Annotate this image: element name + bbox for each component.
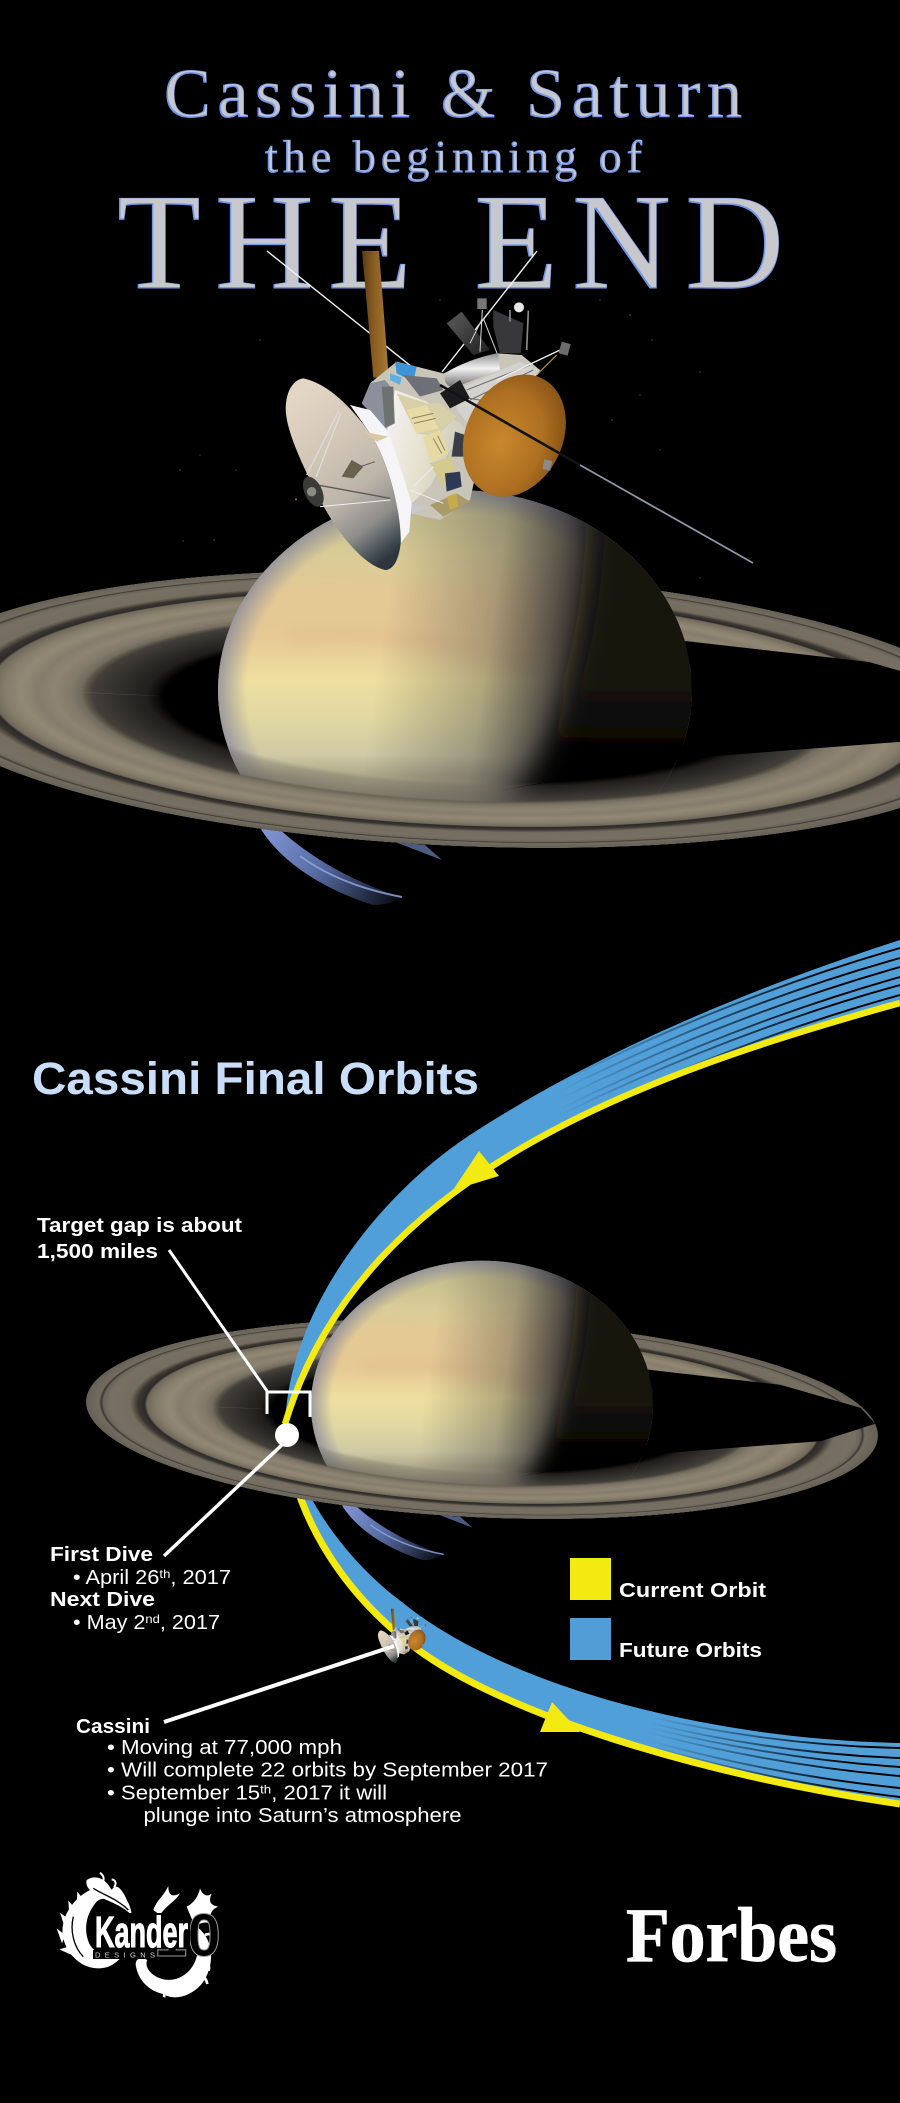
- current orbit, incoming: [285, 1003, 900, 1424]
- dive dates text: [50, 1543, 231, 1634]
- heading: Cassini Final Orbits: Cassini Final Orbits: [32, 1053, 479, 1104]
- saturn rings front and planet shadow, upper illustration: [0, 547, 900, 871]
- star field: [179, 299, 701, 579]
- Cassini facts text: [76, 1715, 548, 1827]
- target gap value: 1,500 miles: [37, 1240, 158, 1263]
- leader line: [164, 1442, 285, 1556]
- saturn, lower illustration (rings and planet): [81, 1217, 883, 1560]
- leader line: [169, 1250, 267, 1391]
- small Cassini spacecraft on orbit: [378, 1609, 429, 1663]
- current orbit, outgoing: [285, 1424, 900, 1804]
- spacecraft antenna wires: [267, 251, 537, 387]
- logo wordmark Designs: DESIGNS: [95, 1950, 155, 1960]
- fact: speed: • Moving at 77,000 mph: [107, 1737, 342, 1759]
- legend swatch: current orbit: [570, 1558, 611, 1600]
- gap bracket: [267, 1392, 310, 1417]
- title line: the beginning of: the beginning of: [265, 131, 643, 182]
- orbit separation lines, outgoing: [650, 1717, 900, 1797]
- first dive date: , 2017: [170, 1567, 231, 1589]
- legend label: current orbit: Current Orbit: [619, 1579, 766, 1602]
- title: [117, 56, 784, 318]
- fact: plunge date: • September 15: [107, 1782, 245, 1804]
- dive marker and leader line: [164, 1423, 299, 1556]
- title line: THE END: THE END: [117, 166, 784, 318]
- saturn rings front and planet shadow, lower illustration: [81, 1302, 883, 1535]
- next dive date: • May 2: [73, 1612, 140, 1634]
- first dive date: • April 26: [73, 1567, 152, 1589]
- next dive date: nd: [145, 1612, 160, 1626]
- dive point marker: [275, 1423, 299, 1447]
- future orbits, incoming band: [285, 940, 900, 1424]
- logo wordmark backing: [93, 1913, 190, 1949]
- first dive date: th: [159, 1567, 170, 1581]
- fact: orbits: • Will complete 22 orbits by September 2017: [107, 1760, 548, 1782]
- target gap callout: [37, 1214, 310, 1417]
- fact: plunge date: , 2017 it will: [271, 1782, 387, 1804]
- arrow: incoming direction: [453, 1151, 499, 1190]
- Cassini leader line: [164, 1646, 394, 1722]
- future orbits, outgoing band: [304, 1500, 900, 1800]
- legend swatch: future orbits: [570, 1618, 611, 1660]
- title line: Cassini & Saturn: Cassini & Saturn: [164, 56, 742, 133]
- Forbes logo: Forbes: [626, 1892, 837, 1978]
- saturn, upper illustration (rings and planet): [0, 430, 900, 905]
- Cassini label: Cassini: [76, 1715, 150, 1738]
- fact: plunge continued: plunge into Saturn’s atmosphere: [144, 1805, 462, 1827]
- orbit paths: [285, 940, 900, 1804]
- fact: plunge date: th: [260, 1782, 271, 1796]
- logo flames: [57, 1873, 218, 1997]
- arrow: outgoing direction: [540, 1702, 580, 1732]
- Cassini spacecraft illustration: [286, 251, 585, 570]
- target gap text: Target gap is about: [37, 1214, 242, 1237]
- legend label: future orbits: Future Orbits: [619, 1639, 762, 1662]
- legend: [570, 1558, 766, 1662]
- Kander Designs logo: [57, 1873, 221, 1997]
- logo wordmark Kander: Kander: [95, 1908, 188, 1957]
- First Dive label: First Dive: [50, 1543, 153, 1566]
- orbit separation lines, incoming: [573, 947, 900, 1110]
- spacecraft long antenna boom: [440, 385, 753, 563]
- Next Dive label: Next Dive: [50, 1588, 155, 1611]
- logo number 10: 10: [154, 1902, 221, 1969]
- next dive date: , 2017: [160, 1612, 220, 1634]
